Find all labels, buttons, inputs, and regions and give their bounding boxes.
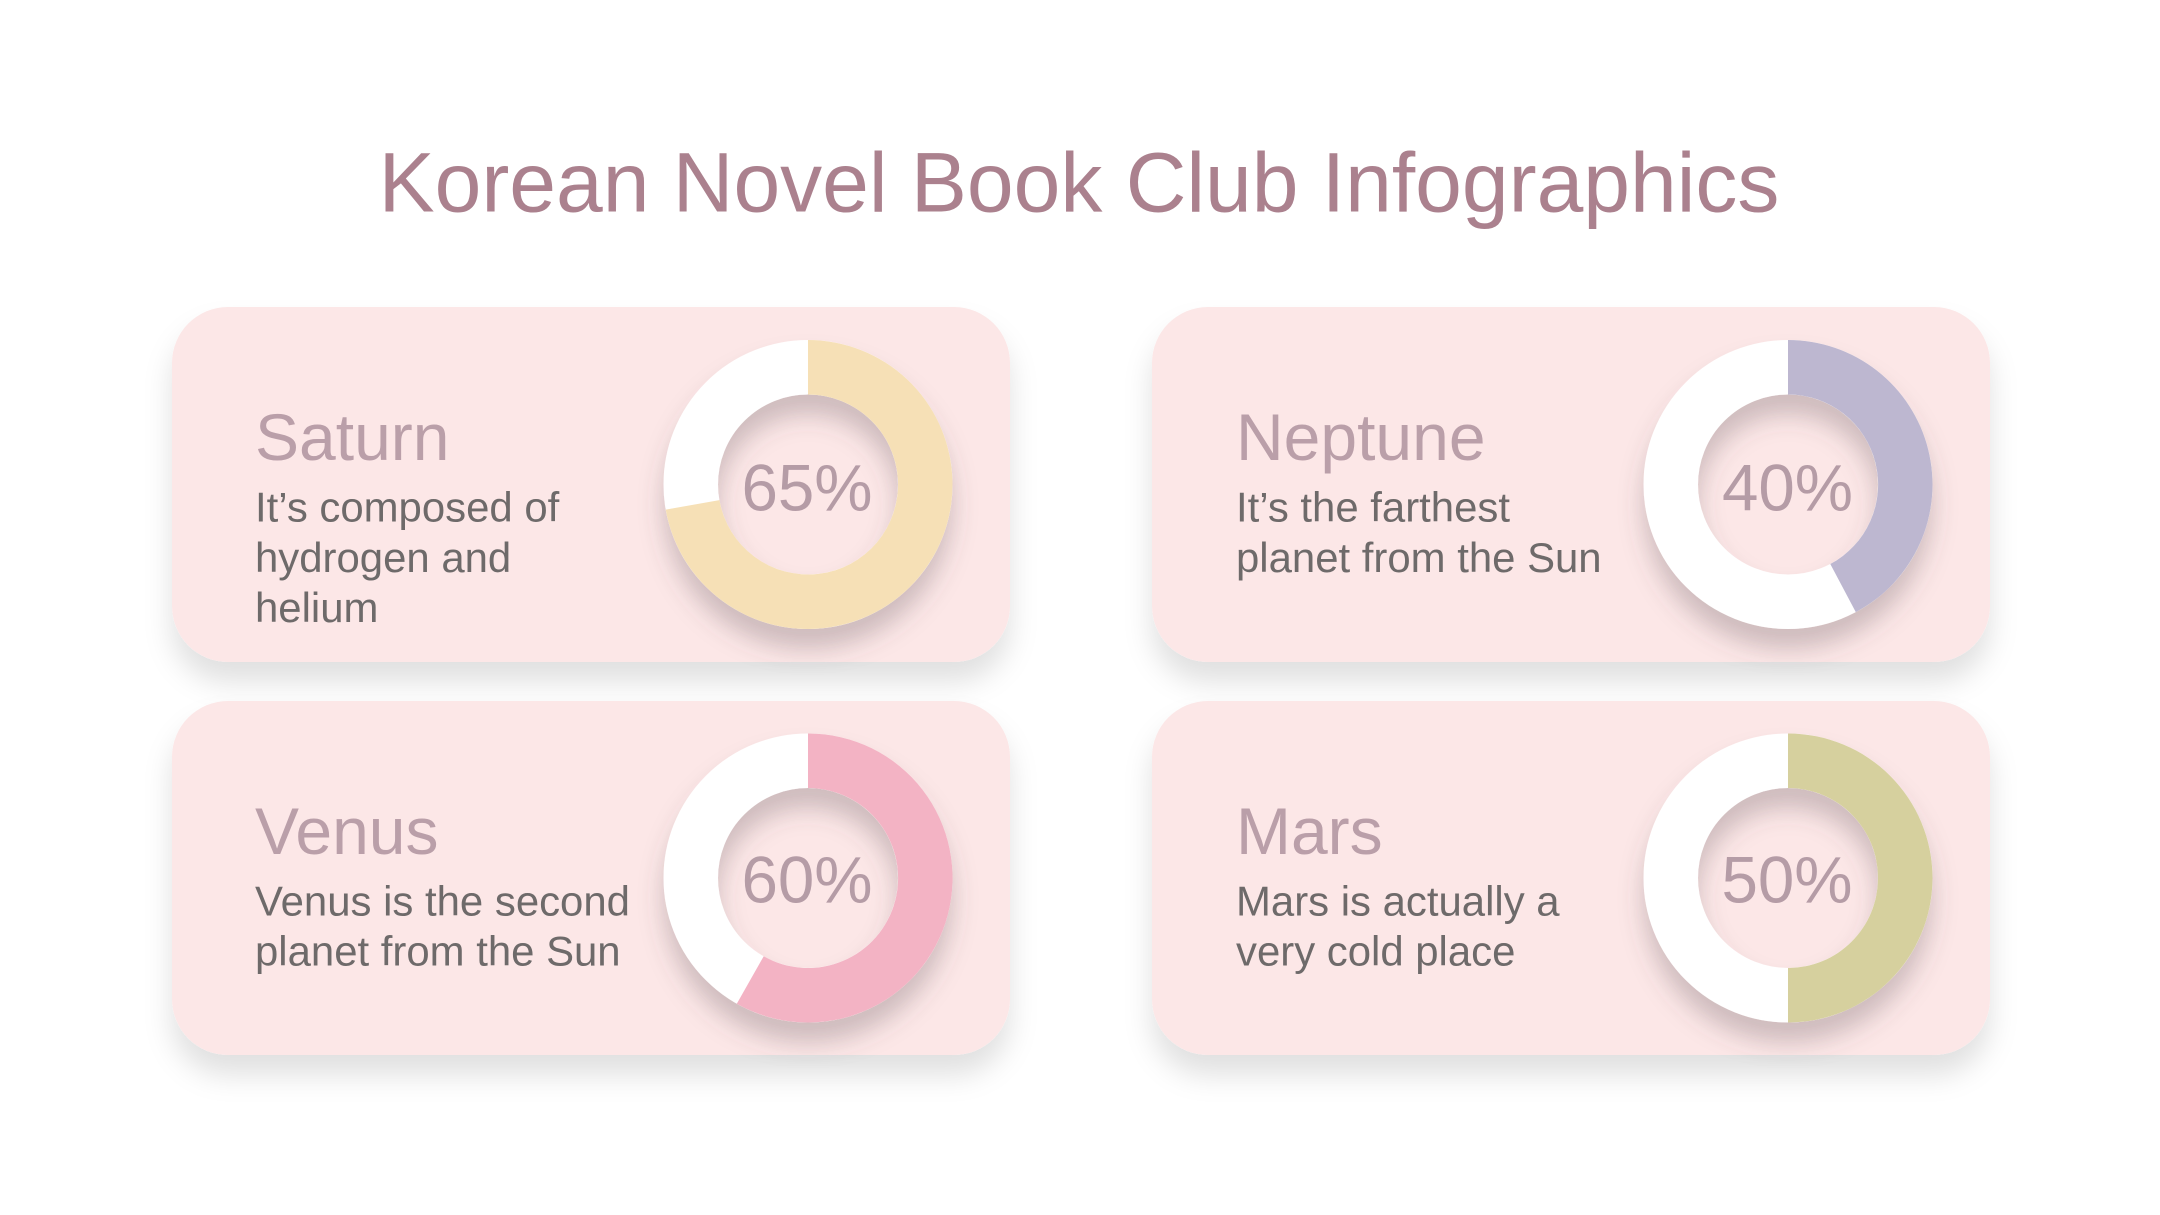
text block: Venus description: planet from the Sun	[255, 928, 621, 974]
panel: Saturn	[172, 307, 1010, 662]
text block: Saturn description	[255, 484, 560, 631]
card background: Saturn	[172, 307, 1010, 662]
text block: Saturn description: It’s composed of	[255, 484, 560, 530]
text block: Saturn description: helium	[255, 584, 378, 631]
heading: Saturn: Saturn	[255, 400, 449, 474]
title: Korean Novel Book Club Infographics	[379, 136, 1779, 230]
heading: Mars: Mars	[1236, 794, 1383, 868]
text block: Venus description	[255, 878, 630, 974]
text block: Venus description: Venus is the second	[255, 878, 630, 924]
heading: Venus: Venus	[255, 794, 438, 868]
text block: Neptune description: It’s the farthest	[1236, 484, 1510, 530]
heading: Neptune: Neptune	[1236, 400, 1486, 474]
donut chart: Neptune 40%	[1671, 340, 1932, 612]
donut chart: Saturn 65%	[666, 340, 953, 629]
percentage: Neptune: 40%	[1722, 452, 1853, 524]
card background: Neptune	[1152, 307, 1990, 662]
donut chart: Venus 60%	[691, 733, 953, 1022]
text block: Mars description: Mars is actually a	[1236, 878, 1560, 924]
text block: Mars description: very cold place	[1236, 928, 1515, 974]
percentage: Venus: 60%	[741, 844, 873, 916]
text block: Neptune description	[1236, 484, 1602, 581]
card background: Venus	[172, 701, 1010, 1055]
card background: Mars	[1152, 701, 1990, 1055]
text block: Saturn description: hydrogen and	[255, 534, 511, 581]
panel: Venus	[172, 701, 1010, 1055]
percentage: Saturn: 65%	[741, 452, 873, 524]
panel: Neptune	[1152, 307, 1990, 662]
panel: Mars	[1152, 701, 1990, 1055]
text block: Mars description	[1236, 878, 1560, 974]
text block: Neptune description: planet from the Sun	[1236, 534, 1602, 581]
donut chart: Mars 50%	[1671, 734, 1933, 1022]
percentage: Mars: 50%	[1721, 844, 1853, 916]
